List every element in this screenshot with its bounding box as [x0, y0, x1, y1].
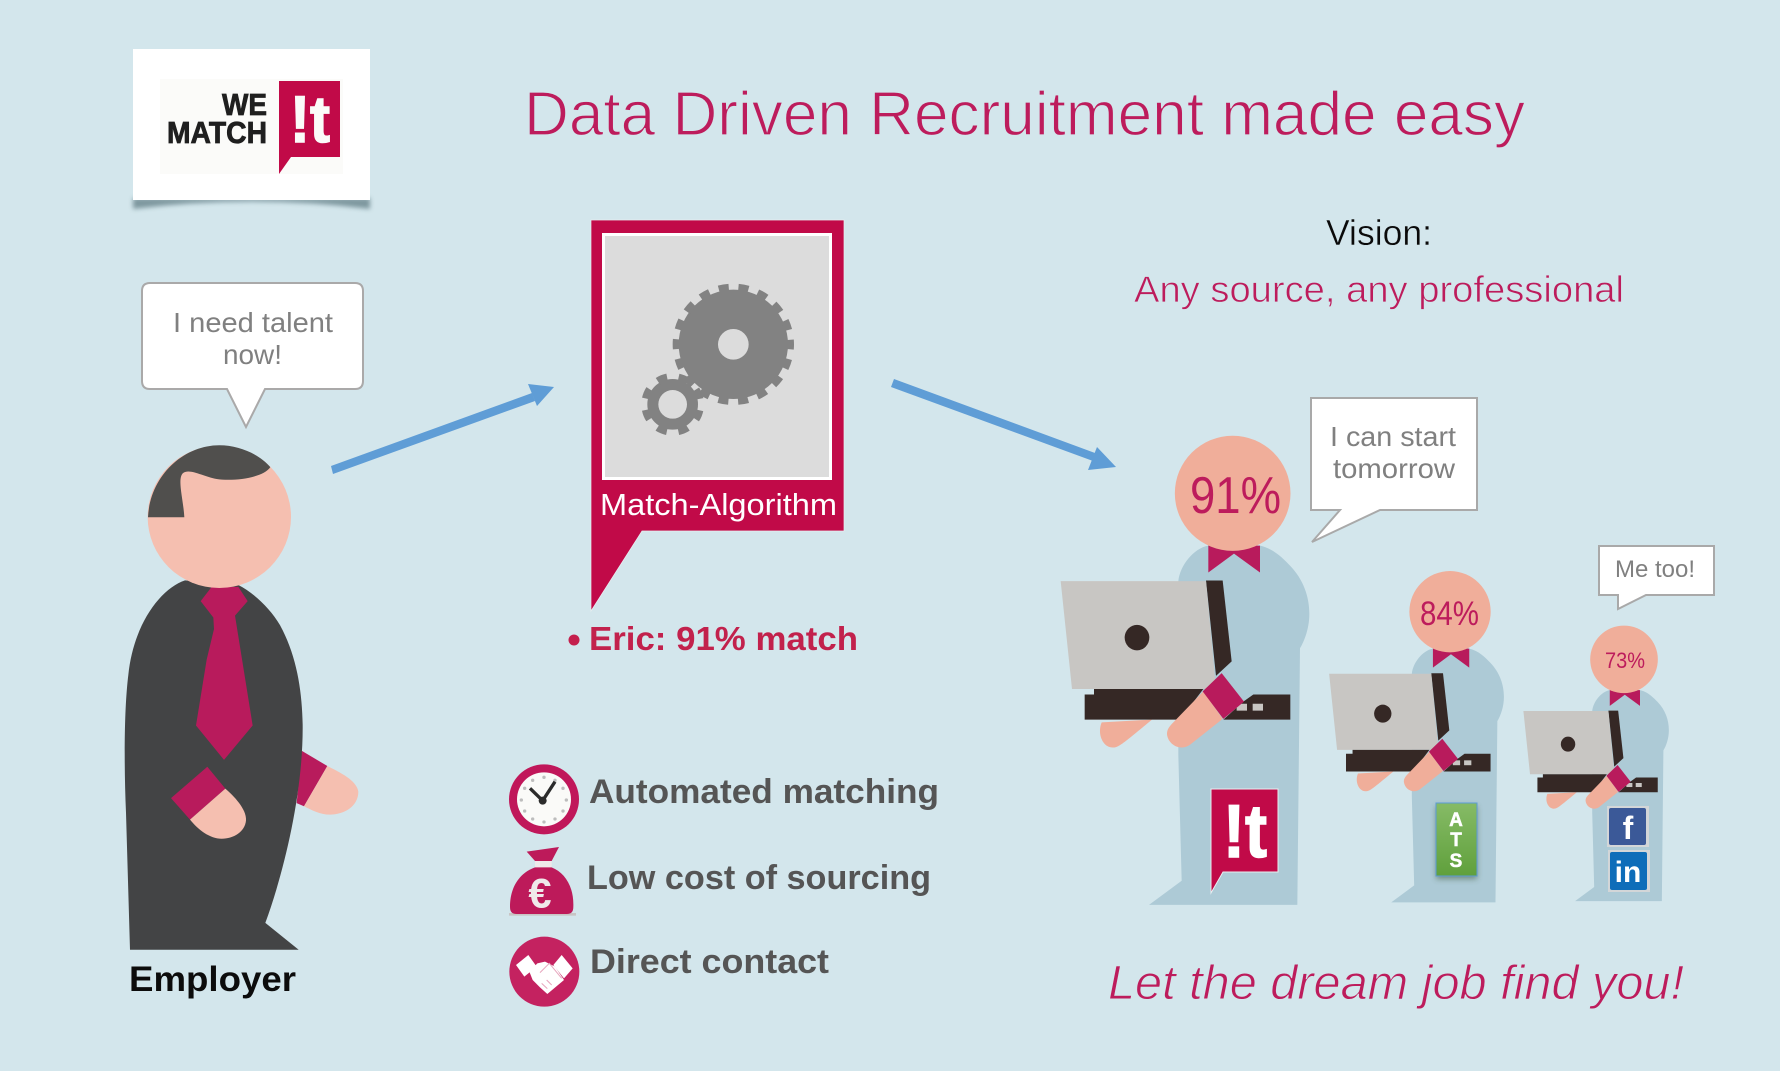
candidate figure: 91%: [1061, 436, 1309, 905]
badge: It logo: [1211, 789, 1278, 893]
candidate figure: 84%: [1329, 571, 1504, 902]
vision heading: Vision:: [1326, 212, 1432, 253]
logo card: We Match It: !t: [290, 82, 330, 156]
candidate figure: 73%: [1523, 626, 1669, 901]
speech bubble: I can start tomorrow: I can start: [1330, 421, 1456, 452]
icon: linkedin: [1608, 850, 1650, 892]
badge: ATS: T: [1450, 830, 1462, 851]
percent: 91%: 91%: [1190, 467, 1281, 525]
percent: 84%: 84%: [1420, 595, 1479, 633]
badge: ATS: [1436, 803, 1477, 879]
icon: clock: [509, 764, 579, 834]
icon: handshake: [509, 937, 579, 1007]
speech bubble: Me too: [1599, 546, 1714, 609]
employer figure: [125, 445, 358, 950]
speech bubble: I can start tomorrow: [1311, 398, 1477, 542]
speech bubble: I need talent now: [142, 283, 363, 427]
speech bubble: I can start tomorrow: tomorrow: [1333, 453, 1456, 484]
text: direct contact: Direct contact: [590, 943, 829, 981]
icon: gears: [637, 288, 790, 440]
icon: facebook: [1607, 806, 1649, 847]
logo card: We Match It: MATCH: [167, 115, 267, 150]
icon: money bag: [509, 847, 576, 917]
title: Data Driven Recruitment made easy: [524, 80, 1525, 149]
icon: facebook: f: [1623, 810, 1634, 846]
arrow: algorithm to candidates: [891, 379, 1116, 470]
icon: money bag: €: [528, 870, 552, 917]
panel: match algorithm: [591, 220, 844, 611]
speech bubble: I need talent now: now!: [223, 339, 282, 370]
tagline: Let the dream job find you!: [1108, 957, 1684, 1010]
speech bubble: I need talent now: I need talent: [173, 307, 333, 338]
logo card: We Match It: WE: [222, 87, 267, 122]
result: Eric 91% match: Eric: 91% match: [589, 620, 858, 657]
speech bubble: Me too: Me too!: [1615, 556, 1695, 583]
arrow: employer to algorithm: [331, 384, 554, 474]
text: low cost of sourcing: Low cost of sourcing: [587, 859, 931, 897]
vision statement: Any source, any professional: [1134, 269, 1624, 310]
panel: match algorithm: Match-Algorithm: [600, 487, 837, 522]
text: automated matching: Automated matching: [589, 773, 939, 811]
badge: ATS: S: [1450, 851, 1462, 872]
logo card: We Match It: [133, 49, 370, 209]
employer label: Employer: [129, 960, 296, 999]
icon: linkedin: in: [1615, 856, 1641, 889]
badge: ATS: A: [1449, 810, 1463, 831]
badge: It logo: !t: [1223, 789, 1267, 873]
percent: 73%: 73%: [1605, 648, 1645, 673]
